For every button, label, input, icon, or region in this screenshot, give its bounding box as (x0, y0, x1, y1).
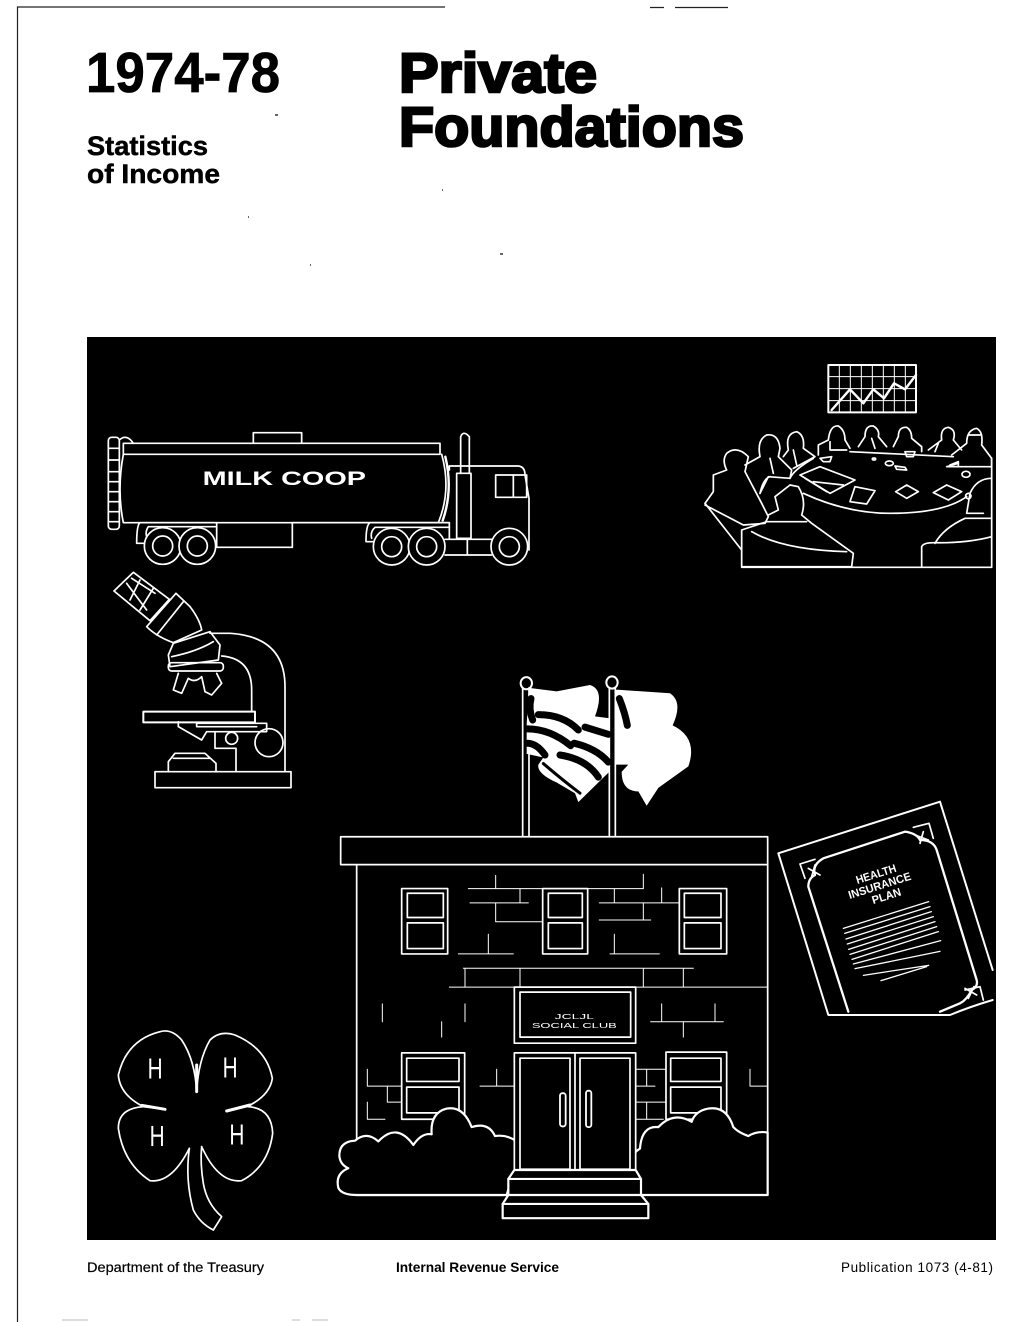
brick lines (367, 874, 767, 1119)
icon: microscope (114, 572, 291, 788)
clover letters: H (229, 1120, 244, 1152)
heading: years: 1974-78 (86, 41, 280, 105)
title: Private Foundations: Private (399, 41, 597, 104)
certificate heading (843, 859, 917, 913)
sign: JCLJL (555, 1012, 594, 1021)
certificate heading: INSURANCE (847, 871, 913, 902)
certificate heading: HEALTH (855, 863, 898, 887)
double doors (514, 1053, 636, 1170)
title: Private Foundations: Foundations (399, 95, 744, 158)
footer: publication number: Publication 1073 (4-81) (841, 1260, 993, 1275)
title: Private Foundations (399, 41, 744, 158)
clover letters: H (148, 1053, 163, 1085)
entrance steps (503, 1170, 648, 1218)
lower windows (402, 1052, 727, 1119)
footer: department: Department of the Treasury (87, 1260, 264, 1275)
icon: milk coop tanker truck (108, 433, 529, 565)
truck label: MILK COOP (203, 469, 366, 490)
subheading: Statistics of Income (87, 131, 220, 189)
footer: internal revenue service: Internal Revenue Service (396, 1259, 559, 1275)
certificate heading: PLAN (871, 887, 903, 907)
icon: boardroom meeting with chart (705, 365, 992, 567)
icon: social club building with flags (338, 676, 768, 1218)
black illustration panel (87, 337, 996, 1240)
subheading: Statistics of Income: of Income (87, 159, 220, 189)
clover letters: H (223, 1053, 238, 1085)
subheading: Statistics of Income: Statistics (87, 131, 208, 161)
clover letters: H (150, 1121, 165, 1153)
upper windows (402, 889, 727, 954)
icon: 4-H four leaf clover (118, 1031, 273, 1230)
bushes (338, 1108, 768, 1195)
flags (521, 676, 691, 836)
sign (514, 987, 636, 1043)
chart on wall (828, 365, 916, 412)
icon: health insurance plan certificate (778, 802, 993, 1015)
clover letters (148, 1053, 244, 1153)
sign: SOCIAL CLUB (532, 1021, 617, 1030)
